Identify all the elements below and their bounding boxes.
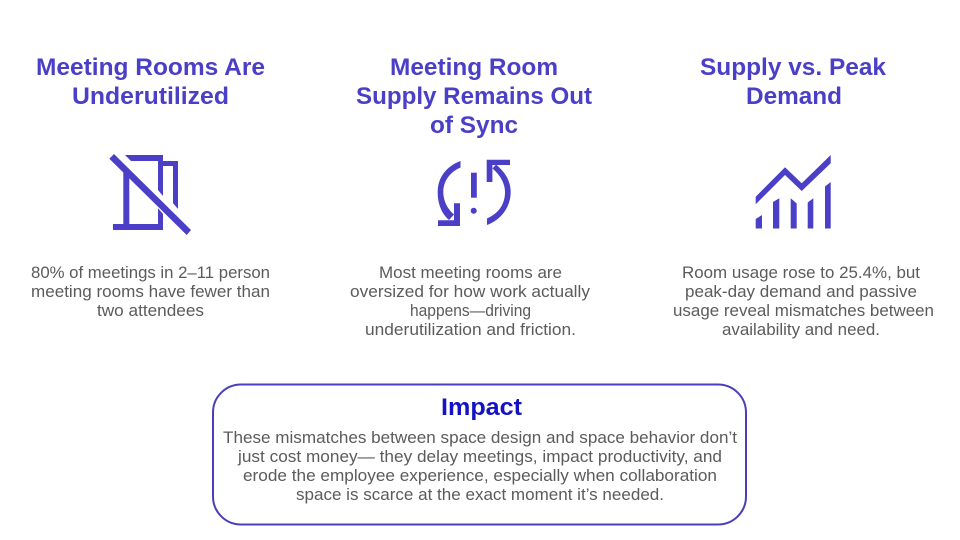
- text: room usage description: usage reveal mismatches between: [673, 302, 934, 320]
- text: impact description: erode the employee experience, especially when collaboration: [243, 467, 717, 485]
- text: supply out of sync description: Most meeting rooms are: [379, 264, 562, 282]
- panel: meeting room supply remains out of sync: [350, 54, 592, 339]
- panel: meeting rooms are underutilized: [31, 54, 270, 320]
- heading: supply vs. peak demand: [700, 54, 887, 110]
- panel: supply vs. peak demand: [673, 54, 934, 339]
- icon: trend line over bars: [756, 155, 831, 228]
- panel: impact callout: [213, 384, 746, 524]
- text: impact description: These mismatches between space design and space behavior don’t: [223, 429, 737, 447]
- heading: supply vs. peak demand: Demand: [746, 83, 842, 110]
- text: supply out of sync description: happens—driving: [410, 302, 531, 320]
- text: impact description: just cost money— they delay meetings, impact productivity, and: [237, 448, 722, 466]
- icon: crossed-out door: [109, 154, 191, 235]
- callout border: [213, 384, 746, 524]
- heading: meeting room supply remains out of sync: of Sync: [430, 112, 518, 139]
- text: supply out of sync description: [350, 264, 591, 339]
- heading: meeting room supply remains out of sync: [356, 54, 592, 139]
- text: underutilization statistic: 80% of meetings in 2–11 person: [31, 264, 270, 282]
- text: supply out of sync description: underutilization and friction.: [365, 321, 576, 339]
- icon: sync arrows with exclamation mark: [438, 160, 511, 226]
- text: room usage description: Room usage rose to 25.4%, but: [682, 264, 920, 282]
- heading: impact: Impact: [441, 394, 522, 421]
- text: underutilization statistic: meeting rooms have fewer than: [31, 283, 270, 301]
- text: underutilization statistic: [31, 264, 270, 320]
- text: supply out of sync description: oversized for how work actually: [350, 283, 591, 301]
- heading: meeting room supply remains out of sync: Supply Remains Out: [356, 83, 592, 110]
- heading: meeting rooms are underutilized: Underutilized: [72, 83, 229, 110]
- text: room usage description: peak-day demand and passive: [685, 283, 917, 301]
- heading: supply vs. peak demand: Supply vs. Peak: [700, 54, 887, 81]
- text: room usage description: [673, 264, 934, 339]
- heading: meeting rooms are underutilized: [36, 54, 265, 110]
- text: impact description: [223, 429, 737, 504]
- text: underutilization statistic: two attendees: [97, 302, 204, 320]
- heading: meeting room supply remains out of sync: Meeting Room: [390, 54, 558, 81]
- text: room usage description: availability and need.: [722, 321, 880, 339]
- text: impact description: space is scarce at the exact moment it’s needed.: [296, 486, 664, 504]
- heading: meeting rooms are underutilized: Meeting Rooms Are: [36, 54, 265, 81]
